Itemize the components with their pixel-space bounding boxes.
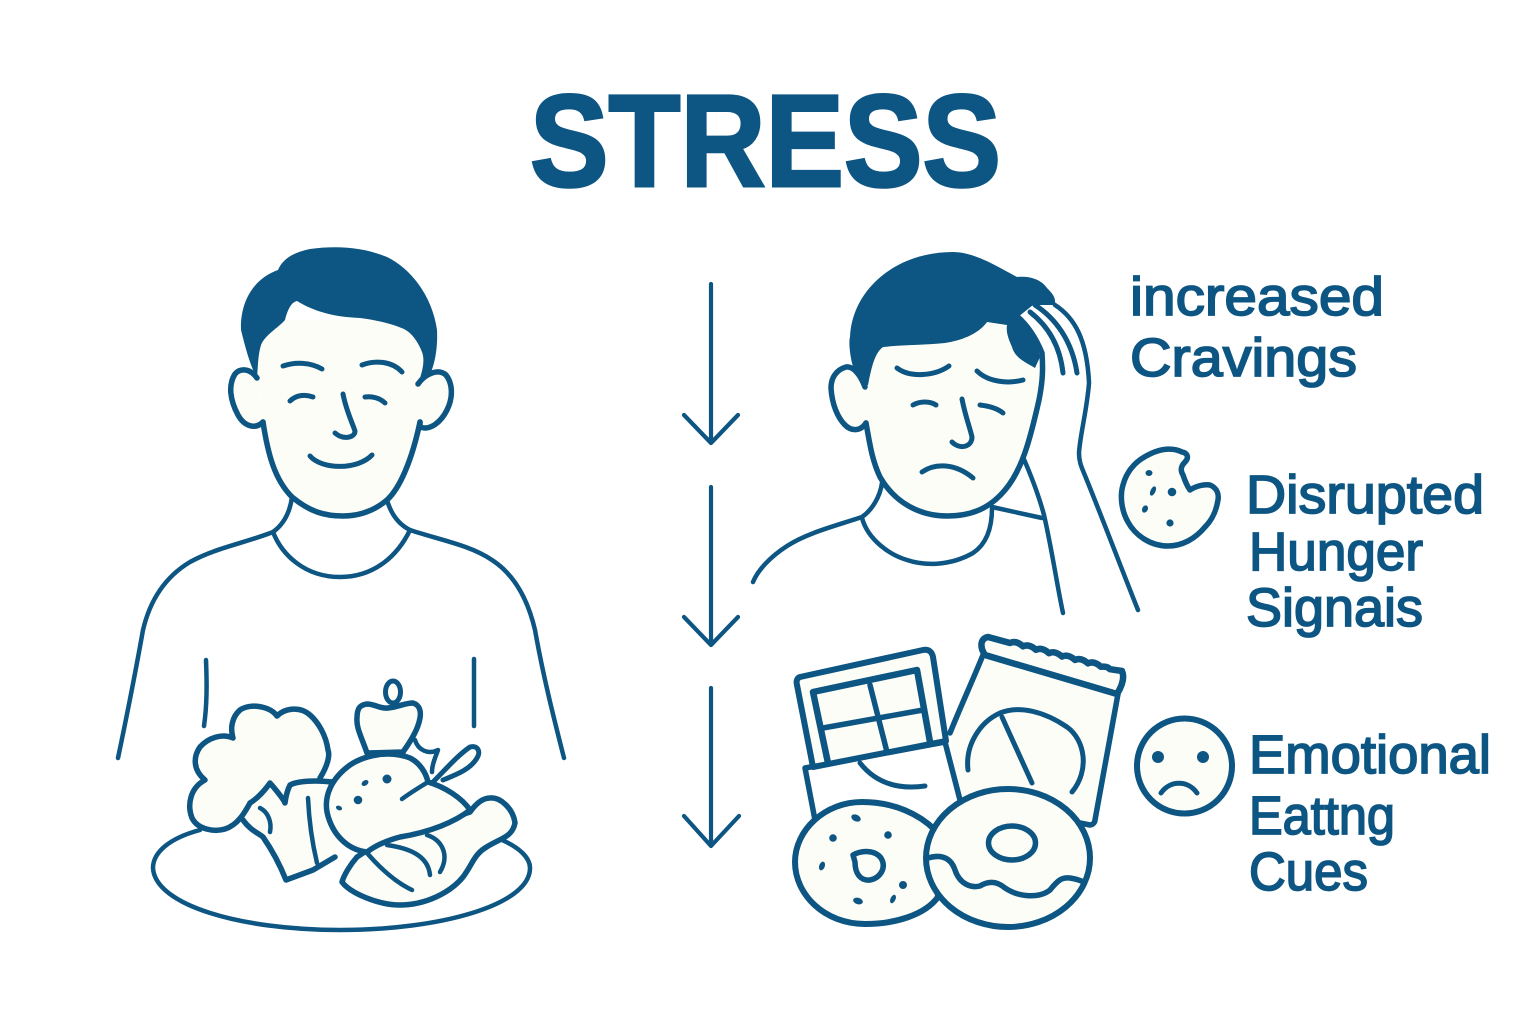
panel: comfort foods	[795, 637, 1123, 927]
text block: disrupted hunger signals: Hunger	[1249, 522, 1423, 582]
text block: emotional eating cues: Cues	[1249, 842, 1368, 902]
text block: increased cravings	[1130, 267, 1384, 388]
text block: disrupted hunger signals: Signais	[1246, 578, 1423, 638]
title: STRESS	[530, 67, 1001, 214]
carrot top and bulb	[357, 681, 479, 782]
calm person body	[118, 497, 564, 758]
stressed person face	[831, 252, 1077, 516]
sprinkled donut	[795, 802, 938, 924]
calm person face	[231, 247, 451, 516]
text block: emotional eating cues	[1249, 725, 1491, 902]
chocolate bar	[797, 650, 960, 820]
text block: increased cravings: increased	[1130, 267, 1384, 327]
iced donut	[926, 789, 1090, 927]
broccoli	[190, 706, 345, 880]
snack bag	[950, 637, 1123, 825]
icon: bitten cookie	[1121, 449, 1218, 546]
text block: disrupted hunger signals	[1246, 465, 1484, 638]
arrow 3	[684, 688, 739, 846]
healthy food plate	[153, 830, 530, 930]
panel: three downward arrows	[684, 284, 739, 846]
arrow 1	[684, 284, 738, 443]
arrow 2	[684, 487, 738, 645]
panel: calm person with healthy food	[118, 247, 564, 930]
panel: stressed person holding head	[753, 252, 1138, 613]
chicken drumstick	[326, 754, 515, 905]
stressed person body	[753, 305, 1138, 613]
text block: emotional eating cues: Eattng	[1249, 786, 1395, 846]
icon: sad face	[1137, 718, 1232, 814]
text block: increased cravings: Cravings	[1130, 328, 1357, 388]
text block: disrupted hunger signals: Disrupted	[1246, 465, 1484, 525]
text block: emotional eating cues: Emotional	[1249, 725, 1491, 785]
